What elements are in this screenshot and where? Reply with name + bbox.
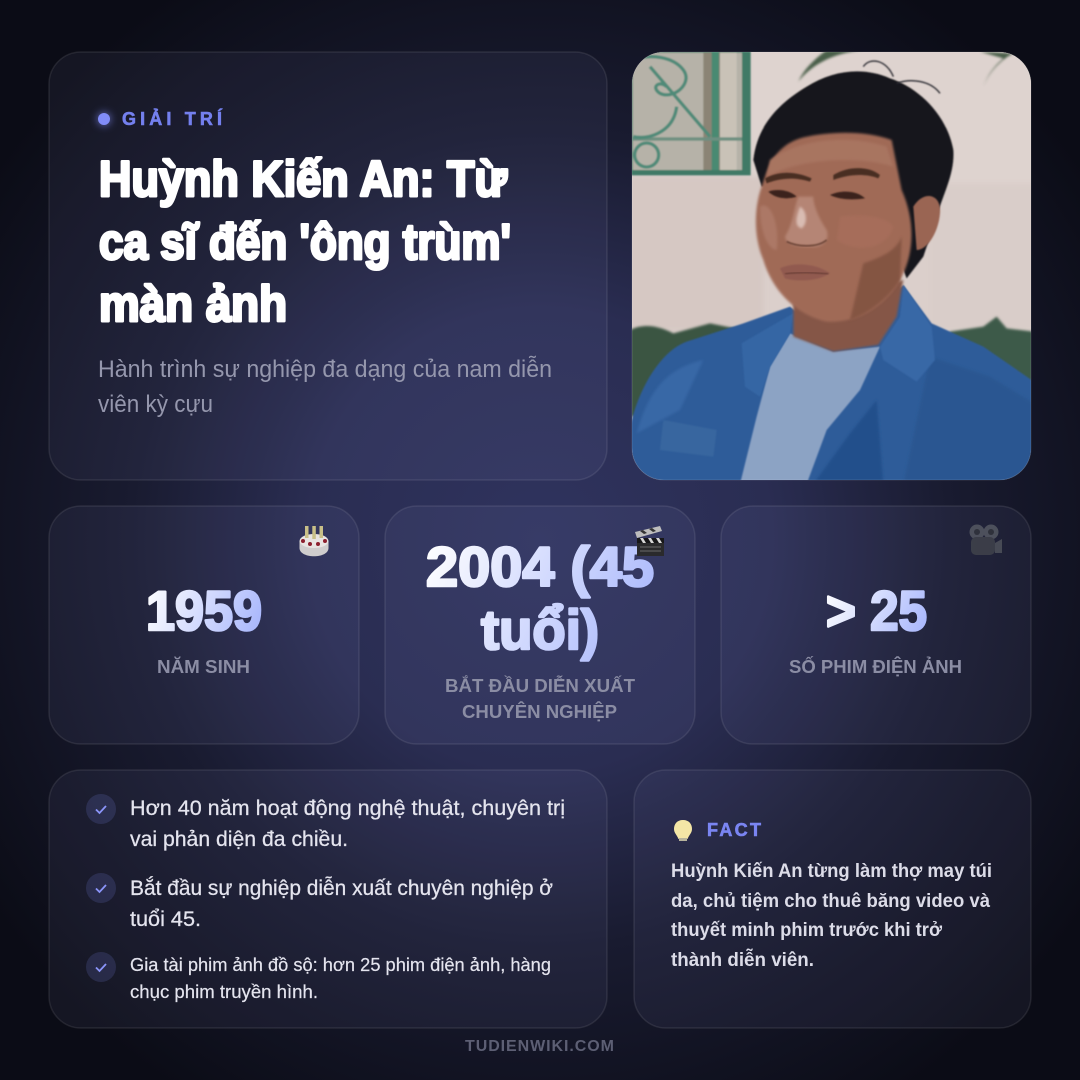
point 3: chục phim truyền hình. [130,981,318,1002]
panel: fact [634,770,1031,1028]
icon: light bulb [674,820,692,841]
point 3: Gia tài phim ảnh đồ sộ: hơn 25 phim điện ảnh, hàng [130,954,551,975]
stat value: 2004 (45 tuổi) [426,535,654,661]
ear [913,196,940,250]
fact text [671,861,992,971]
stat label: SỐ PHIM ĐIỆN ẢNH [789,656,962,677]
panel: birth year stat [49,506,359,744]
heading: Huỳnh Kiến An: Từ [99,151,508,207]
stat label [445,675,635,722]
point 1: Hơn 40 năm hoạt động nghệ thuật, chuyên trị [130,797,565,820]
icon: movie camera [970,524,1002,555]
subtitle: Hành trình sự nghiệp đa dạng của nam diễn [98,356,552,383]
point 2 [86,873,553,931]
heading [99,151,511,332]
icon: clapperboard [635,526,664,556]
t-shirt [740,333,880,484]
subtitle [98,356,552,418]
heading: ca sĩ đến 'ông trùm' [99,214,511,270]
fact heading: FACT [707,820,761,840]
fact text: Huỳnh Kiến An từng làm thợ may túi [671,861,992,882]
nose [785,197,828,247]
fact text: thuyết minh phim trước khi trở [671,920,942,941]
wall shading [630,50,1037,330]
footer credit: TUDIENWIKI.COM [465,1038,614,1055]
stat value: 1959: 1959 [146,579,262,642]
stat label: BẮT ĐẦU DIỄN XUẤT [445,675,635,696]
point 2: tuổi 45. [130,908,201,931]
hair back [753,71,953,278]
palm leaves [798,52,1013,82]
stat value: 2004 (45 tuổi): 2004 (45 [426,535,654,598]
eyebrows and eyes [765,168,880,183]
point 1 [86,794,565,851]
panel: acting debut stat [385,506,695,744]
face [756,133,940,322]
stat label: NĂM SINH [157,656,250,677]
panel: hero [49,52,607,480]
photo: portrait of actor [630,50,1037,484]
fact text: thành diễn viên. [671,949,814,971]
panel: key points [49,770,607,1028]
collars [742,285,935,397]
stat label: CHUYÊN NGHIỆP [462,701,617,722]
point 1: vai phản diện đa chiều. [130,828,348,851]
fact text: da, chủ tiệm cho thuê băng video và [671,891,990,912]
heading: màn ảnh [99,276,287,332]
neck [793,280,903,352]
subtitle: viên kỳ cựu [98,391,213,418]
point 2: Bắt đầu sự nghiệp diễn xuất chuyên nghiệp ở [130,877,553,900]
point 3 [86,952,551,1002]
mouth [780,264,830,280]
panel: film count stat [721,506,1031,744]
denim shirt [630,285,1034,484]
stat value: 2004 (45 tuổi): tuổi) [481,598,599,661]
window [630,50,751,175]
stray curls [863,61,940,93]
icon: birthday cake [300,526,328,556]
hedges [630,317,1034,417]
category tag: GIẢI TRÍ [122,108,223,129]
stat value: > 25: > 25 [826,579,927,642]
